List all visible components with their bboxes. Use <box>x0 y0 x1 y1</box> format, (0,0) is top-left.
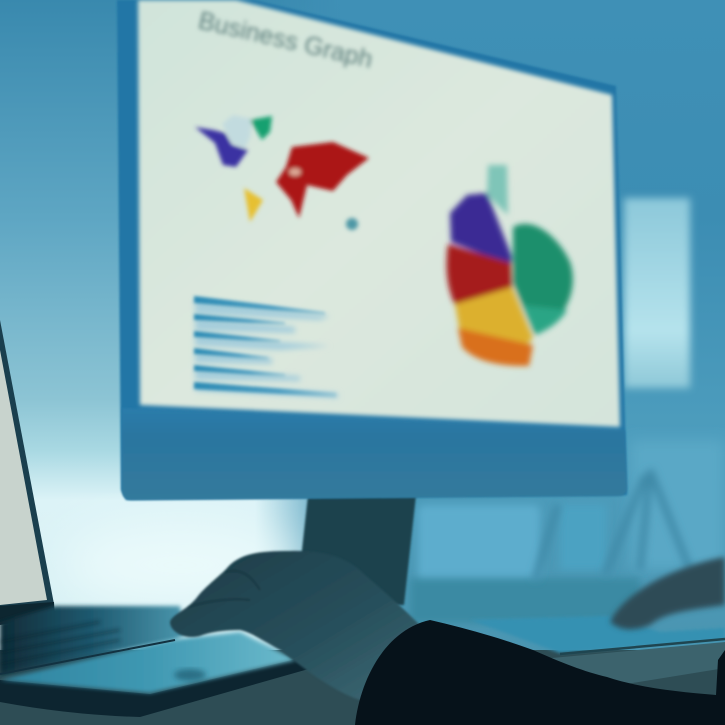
desk <box>0 642 725 725</box>
map: yellow continent <box>244 188 263 222</box>
pie: orange slice <box>458 328 533 366</box>
keyboard <box>0 606 185 675</box>
left hand <box>170 551 420 700</box>
sleeve <box>355 620 725 725</box>
map: green continent <box>250 116 272 140</box>
laptop front edge <box>0 658 312 717</box>
screen title: Business Graph <box>196 7 375 74</box>
palm rest <box>0 632 296 693</box>
map: teal dot <box>346 218 358 230</box>
right keyboard <box>470 616 725 654</box>
map: red continent <box>276 142 369 218</box>
monitor <box>117 0 627 500</box>
blurred panels right of stand <box>418 505 540 605</box>
bar chart <box>194 296 338 398</box>
world map <box>195 115 369 230</box>
screen <box>138 0 620 427</box>
laptop hinge <box>0 602 55 625</box>
lamp legs <box>535 470 690 580</box>
pie chart <box>447 165 573 366</box>
bars: dark stripes <box>194 296 336 397</box>
monitor chin <box>122 408 627 500</box>
glowing window <box>624 198 690 388</box>
right hand <box>610 557 725 629</box>
map: pale continent <box>222 115 252 148</box>
pie: green slice <box>513 224 573 335</box>
pie: teal stem <box>487 165 508 215</box>
laptop <box>0 320 312 717</box>
map: blue continent <box>195 127 248 167</box>
pie: red slice <box>447 244 512 305</box>
laptop lid <box>0 320 54 612</box>
pie: purple slice <box>450 193 512 266</box>
pie: yellow slice <box>455 287 533 348</box>
bars: pale rows <box>195 300 338 398</box>
monitor bezel <box>117 0 627 500</box>
monitor stand <box>296 495 416 605</box>
